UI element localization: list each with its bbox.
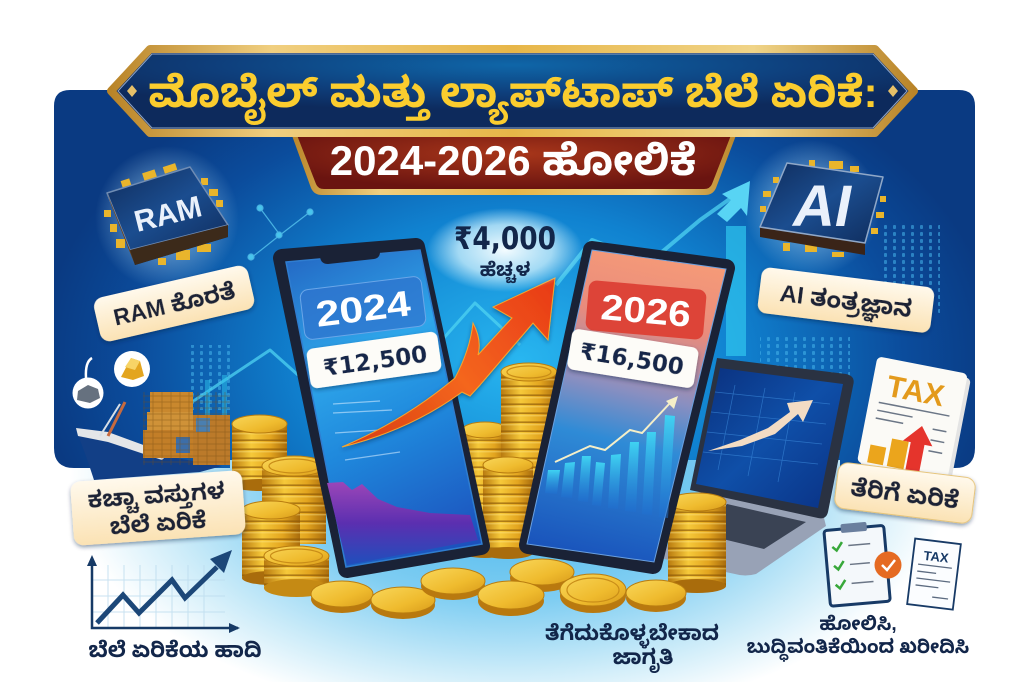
screen grid bbox=[703, 385, 830, 482]
laptop bbox=[660, 358, 854, 576]
icon: RAM chip bbox=[95, 146, 239, 290]
arrow: price increase bbox=[342, 278, 555, 447]
icon: gold bars bbox=[114, 351, 150, 387]
label: tax increase bbox=[834, 462, 976, 524]
screen bbox=[286, 250, 482, 567]
chart: price rise path bbox=[87, 550, 240, 633]
laptop lid bbox=[690, 358, 854, 518]
text: caution: ಜಾಗೃತಿ bbox=[613, 646, 673, 673]
label: AI technology bbox=[757, 267, 935, 334]
year box 2026 bbox=[585, 280, 707, 340]
text: compare and buy wisely: ಬುದ್ಧಿವಂತಿಕೆಯಿಂದ ಖರೀದಿಸಿ bbox=[747, 637, 969, 662]
coin stack: back left bbox=[232, 415, 287, 491]
chip label: AI bbox=[791, 174, 853, 239]
icon: AI chip bbox=[744, 140, 886, 276]
panel: blue background bbox=[54, 90, 975, 468]
year box 2026: 2026 bbox=[599, 286, 693, 335]
coin stack: left front bbox=[264, 546, 329, 597]
icon: tax document: TAX bbox=[884, 370, 947, 413]
mountain bbox=[327, 482, 478, 565]
network nodes bbox=[248, 205, 313, 260]
label: tax increase: ತೆರಿಗೆ ಏರಿಕೆ bbox=[849, 474, 961, 515]
label: raw materials price rise: ಬೆಲೆ ಏರಿಕೆ bbox=[109, 507, 207, 539]
coin stack: left middle bbox=[242, 501, 300, 585]
icon: rock bbox=[72, 358, 104, 408]
trend arrow bbox=[708, 400, 813, 451]
price box ₹16,500 bbox=[567, 328, 699, 389]
laptop base bbox=[660, 490, 826, 576]
phone: 2026 bbox=[527, 248, 726, 565]
coin stack: between phones front bbox=[483, 457, 533, 559]
icon: checklist clipboard bbox=[823, 520, 902, 606]
icon: tax receipt: TAX bbox=[923, 548, 950, 566]
label: raw materials price rise bbox=[70, 470, 246, 546]
background digit rain bbox=[188, 225, 940, 410]
year box 2024 bbox=[299, 276, 427, 340]
icon: raw material shipping bbox=[72, 351, 230, 480]
text: caution bbox=[545, 622, 719, 673]
small text lines bbox=[333, 401, 400, 460]
background chart lines bbox=[165, 186, 748, 420]
label: RAM shortage: RAM ಕೊರತೆ bbox=[111, 277, 238, 331]
icon: tax document bbox=[856, 356, 972, 485]
subtitle banner bbox=[290, 130, 738, 195]
text: price increase amount bbox=[427, 208, 583, 292]
text: price increase amount: ₹4,000 bbox=[454, 221, 556, 257]
icon: tax receipt bbox=[907, 539, 961, 610]
text: price increase amount: ಹೆಚ್ಚಳ bbox=[480, 260, 531, 284]
price box ₹12,500 bbox=[306, 331, 442, 389]
price box ₹16,500: ₹16,500 bbox=[578, 339, 685, 381]
coin stack: behind phone left bbox=[262, 456, 326, 544]
subtitle text: 2024-2026 ಹೋಲಿಕೆ bbox=[330, 137, 696, 184]
coin stack: right of phone 2 bbox=[668, 493, 726, 593]
label: raw materials price rise: ಕಚ್ಚಾ ವಸ್ತುಗಳ bbox=[87, 477, 226, 517]
screen bbox=[527, 250, 726, 562]
laptop screen bbox=[696, 368, 843, 508]
background arrow head bbox=[717, 181, 750, 222]
phone: 2024 bbox=[282, 247, 482, 569]
keyboard bbox=[702, 504, 806, 549]
chip label: RAM bbox=[131, 190, 205, 239]
coin stack: between phones rear bbox=[462, 422, 508, 558]
bar chart bbox=[545, 415, 675, 518]
notch bbox=[320, 252, 380, 264]
text: compare and buy wisely bbox=[747, 614, 969, 662]
label: AI technology: AI ತಂತ್ರಜ್ಞಾನ bbox=[778, 280, 913, 328]
coin stack: between phones tall bbox=[501, 363, 557, 482]
year box 2024: 2024 bbox=[313, 282, 413, 335]
containers bbox=[143, 392, 230, 465]
title banner bbox=[111, 49, 914, 133]
text: caution: ತೆಗೆದುಕೊಳ್ಳಬೇಕಾದ bbox=[545, 622, 719, 649]
trend line bbox=[555, 403, 670, 462]
label: RAM shortage bbox=[92, 264, 256, 343]
text: price rise path: ಬೆಲೆ ಏರಿಕೆಯ ಹಾದಿ bbox=[89, 638, 261, 662]
light blue floor glow bbox=[0, 440, 1024, 682]
price box ₹12,500: ₹12,500 bbox=[322, 342, 429, 382]
title text: ಮೊಬೈಲ್ ಮತ್ತು ಲ್ಯಾಪ್‌ಟಾಪ್ ಬೆಲೆ ಏರಿಕೆ: bbox=[148, 70, 878, 125]
notch bbox=[628, 248, 688, 262]
background bars bbox=[205, 226, 746, 440]
flat gold coins bbox=[311, 559, 686, 619]
text: compare and buy wisely: ಹೋಲಿಸಿ, bbox=[819, 614, 897, 635]
ship hull bbox=[76, 430, 222, 480]
